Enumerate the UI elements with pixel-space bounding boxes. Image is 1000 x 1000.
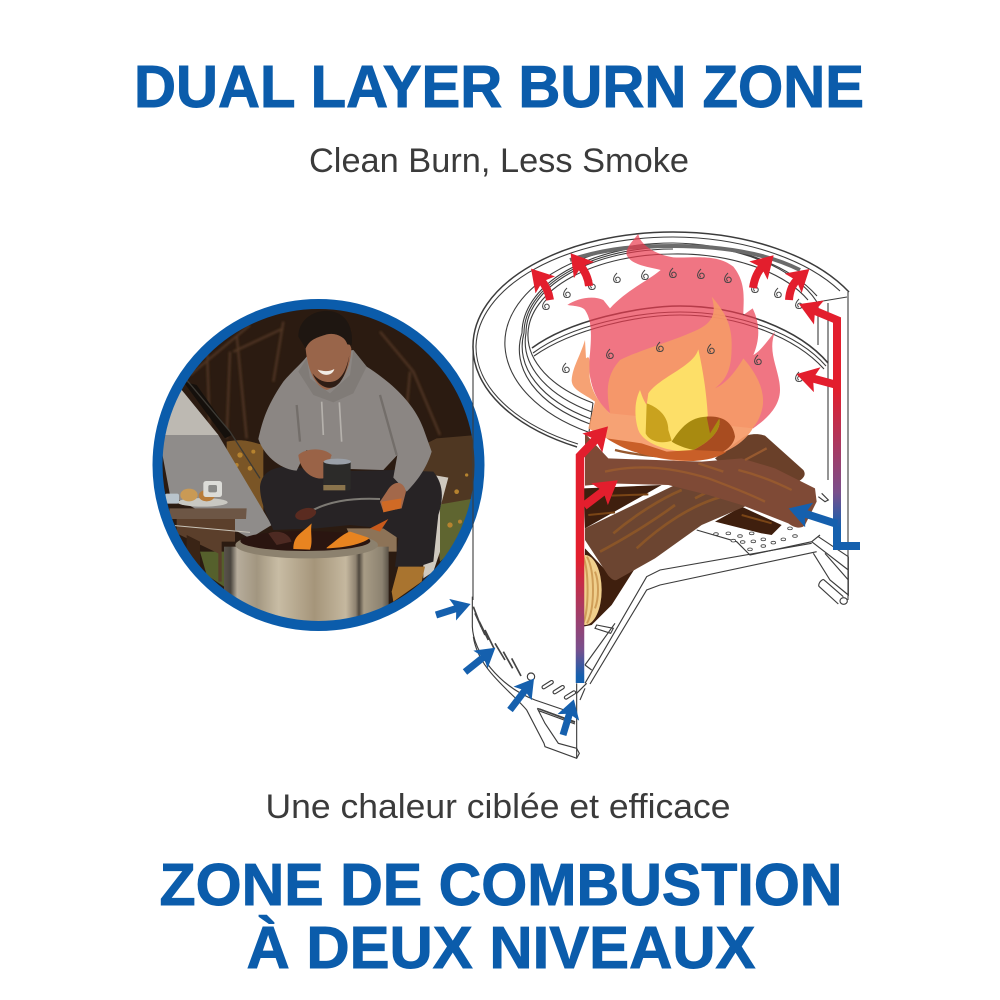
hoodie xyxy=(258,350,432,492)
seat xyxy=(423,475,448,578)
yellow flame xyxy=(635,349,720,452)
french title: À DEUX NIVEAUX xyxy=(246,915,756,981)
logs xyxy=(568,433,817,627)
french title: ZONE DE COMBUSTION xyxy=(160,852,842,918)
blue intake arrows xyxy=(436,608,570,735)
circular lifestyle photo xyxy=(150,295,490,635)
tent xyxy=(160,390,272,538)
base and floor lines xyxy=(472,493,848,758)
front gradient air channel xyxy=(580,438,605,683)
air holes xyxy=(543,268,802,382)
table xyxy=(169,508,247,519)
flame xyxy=(567,234,780,461)
head xyxy=(305,332,351,390)
pants xyxy=(260,467,442,568)
right side gradient air channel xyxy=(803,310,860,550)
hand and mug xyxy=(298,449,332,479)
subtitle: Clean Burn, Less Smoke xyxy=(309,142,689,180)
french title xyxy=(160,852,842,981)
orange flame xyxy=(572,297,763,461)
outer red flame xyxy=(567,234,780,428)
french subtitle: Une chaleur ciblée et efficace xyxy=(266,788,730,826)
boot xyxy=(392,567,425,602)
roasting stick xyxy=(313,498,380,510)
fire pit xyxy=(224,547,389,622)
photo border xyxy=(158,304,480,626)
outer rim and rings xyxy=(473,232,849,600)
fire pit cutaway diagram xyxy=(436,232,860,758)
red arrows along top rim xyxy=(541,265,798,300)
title: DUAL LAYER BURN ZONE xyxy=(134,54,864,120)
